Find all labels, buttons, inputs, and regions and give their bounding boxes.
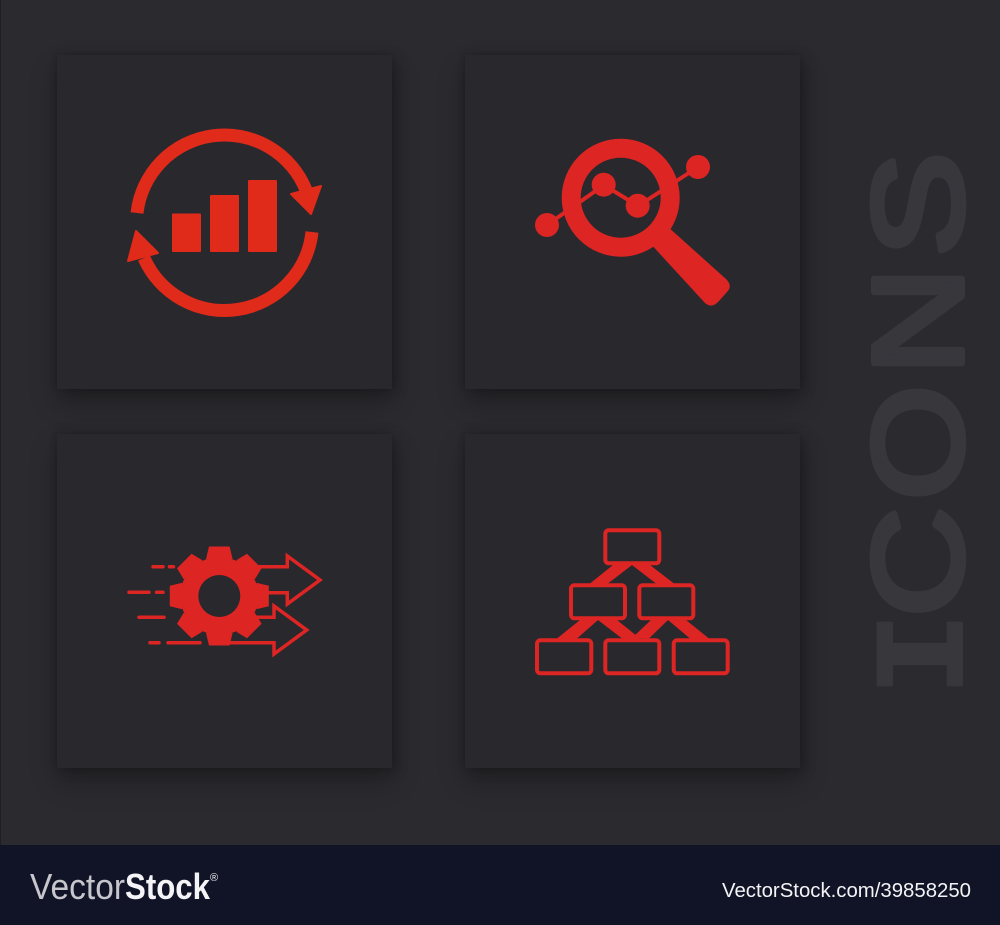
panel: hierarchy bbox=[465, 434, 800, 768]
vertical watermark: ICONS: S bbox=[847, 152, 990, 257]
panel: magnifier analytics bbox=[465, 55, 800, 389]
footer bar bbox=[0, 845, 1000, 925]
vertical watermark: ICONS: I bbox=[856, 612, 1000, 696]
footer logo: VectorStock: Stock bbox=[125, 866, 211, 907]
icon: refresh arrows with bar chart bbox=[128, 135, 321, 310]
icon: gear with speed arrows bbox=[129, 546, 320, 654]
footer image id: VectorStock.com/39858250 bbox=[722, 880, 971, 902]
panel: chart refresh bbox=[57, 55, 392, 389]
footer logo: VectorStock: Vector bbox=[30, 866, 125, 907]
icon: magnifier over line chart bbox=[535, 148, 730, 306]
icon: hierarchy of boxes bbox=[537, 530, 728, 673]
footer logo: VectorStock bbox=[30, 866, 218, 907]
vertical watermark: ICONS bbox=[847, 152, 1000, 696]
vertical watermark: ICONS: N bbox=[847, 267, 990, 375]
panel: gear with arrows bbox=[57, 434, 392, 768]
footer logo: VectorStock: ® bbox=[210, 872, 218, 884]
vertical watermark: ICONS: O bbox=[847, 385, 990, 500]
vertical watermark: ICONS: C bbox=[847, 507, 990, 617]
